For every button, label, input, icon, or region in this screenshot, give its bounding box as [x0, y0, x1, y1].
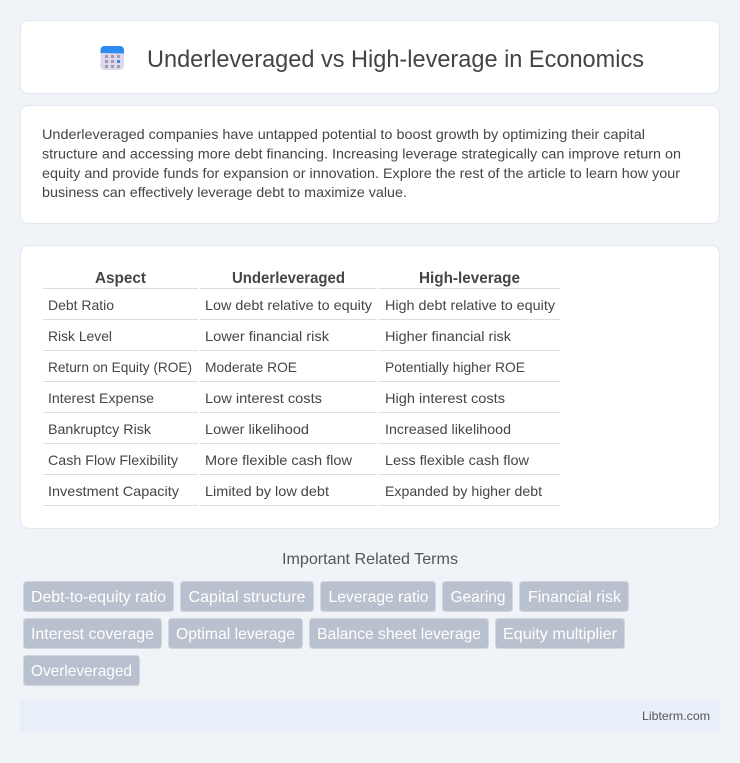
footer	[20, 699, 720, 733]
table header	[95, 270, 520, 287]
heading: related terms: Important Related Terms	[282, 551, 458, 568]
panel: introduction: Underleveraged companies have untapped potential to boost growth by optimizing their capital	[42, 126, 645, 142]
related terms tags: Capital structure	[188, 589, 306, 606]
icon: calendar	[100, 46, 124, 70]
row: investment capacity: Investment Capacity	[48, 483, 179, 499]
row: interest expense: Interest Expense	[48, 390, 154, 406]
row: investment capacity: Expanded by higher debt	[385, 483, 542, 499]
row: risk level: Risk Level	[48, 328, 112, 344]
row: debt ratio: Debt Ratio	[48, 297, 114, 313]
panel: introduction	[20, 106, 720, 224]
related terms tags: Leverage ratio	[328, 589, 429, 606]
related terms tags: Overleveraged	[31, 663, 132, 680]
row: debt ratio: Low debt relative to equity	[205, 297, 372, 313]
row: bankruptcy risk: Bankruptcy Risk	[48, 421, 152, 437]
row: cash flow flexibility: Less flexible cash flow	[385, 452, 530, 468]
table header: Aspect	[95, 270, 147, 287]
row: risk level: Higher financial risk	[385, 328, 512, 344]
row: risk level	[48, 328, 512, 344]
related terms tags: Interest coverage	[31, 626, 154, 643]
header panel	[20, 20, 720, 94]
row: debt ratio: High debt relative to equity	[385, 297, 555, 313]
panel: introduction: equity and provide funds for expansion or innovation. Explore the rest of the article to learn how your	[42, 165, 680, 181]
panel: introduction: structure and accessing more debt financing. Increasing leverage strategically can improve return on	[42, 146, 681, 162]
row: risk level: Lower financial risk	[205, 328, 330, 344]
table header: High-leverage	[419, 270, 520, 287]
row: return on equity: Return on Equity (ROE)	[48, 359, 192, 375]
related terms tags: Optimal leverage	[176, 626, 295, 643]
row: return on equity	[48, 359, 525, 375]
row: debt ratio	[48, 297, 555, 313]
related terms tags: Financial risk	[528, 589, 622, 606]
row: bankruptcy risk: Lower likelihood	[205, 421, 309, 437]
related terms tags: Debt-to-equity ratio	[31, 589, 166, 606]
related terms tags: Balance sheet leverage	[317, 626, 481, 643]
row: bankruptcy risk	[48, 421, 511, 437]
table header: Underleveraged	[232, 270, 345, 287]
row: interest expense	[48, 390, 505, 406]
row: return on equity: Potentially higher ROE	[385, 359, 525, 375]
title: Underleveraged vs High-leverage in Economics	[147, 46, 644, 73]
footer: Libterm.com	[642, 709, 710, 723]
related terms tags: Equity multiplier	[503, 626, 618, 643]
row: investment capacity	[48, 483, 542, 499]
related terms tags: Gearing	[450, 589, 506, 606]
related terms tags	[24, 582, 628, 686]
row: interest expense: High interest costs	[385, 390, 505, 406]
panel: introduction: business can effectively leverage debt to maximize value.	[42, 184, 407, 200]
row: cash flow flexibility: Cash Flow Flexibility	[48, 452, 178, 468]
row: cash flow flexibility: More flexible cash flow	[205, 452, 353, 468]
row: bankruptcy risk: Increased likelihood	[385, 421, 511, 437]
row: return on equity: Moderate ROE	[205, 359, 297, 375]
row: interest expense: Low interest costs	[205, 390, 322, 406]
row: investment capacity: Limited by low debt	[205, 483, 329, 499]
row: cash flow flexibility	[48, 452, 530, 468]
panel: comparison table	[20, 246, 720, 528]
